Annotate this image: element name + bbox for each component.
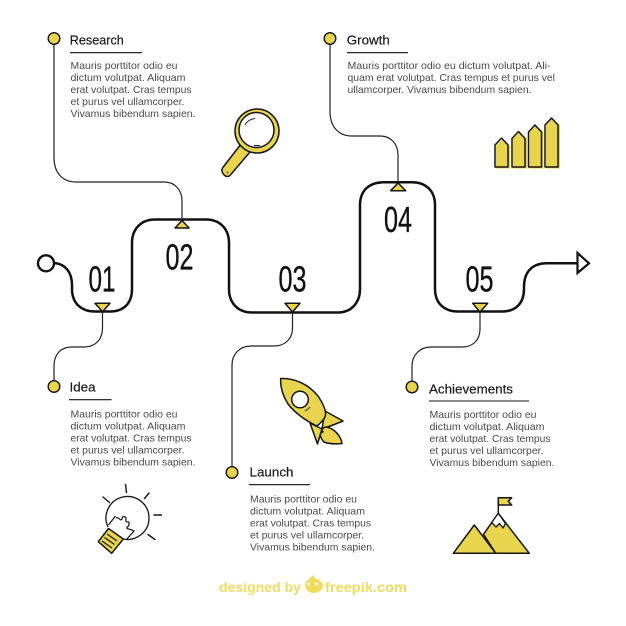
- step 02: Research: Mauris porttitor odio eu: [70, 61, 178, 72]
- step 04: Growth: Mauris porttitor odio eu dictum volutpat. Ali-: [348, 61, 550, 72]
- step 05: Achievements: 05: [466, 258, 494, 300]
- step 02: Research: 02: [166, 236, 194, 278]
- step 03: Launch: [226, 258, 375, 553]
- icon: mountains with flag: [453, 498, 529, 553]
- icon: magnifying glass: [222, 109, 279, 176]
- step 03: Launch: Launch: [250, 465, 294, 480]
- step 04: Growth: Growth: [347, 32, 390, 47]
- step 02: Research: dictum volutpat. Aliquam: [70, 73, 186, 84]
- footer: designed by freepik: freepik.com: [325, 579, 407, 595]
- step 01: Idea: erat volutpat. Cras tempus: [70, 433, 192, 444]
- step 01: Idea: Mauris porttitor odio eu: [70, 409, 178, 420]
- icon: rocket: [281, 378, 343, 444]
- step 04: Growth: [324, 32, 555, 240]
- step 01: Idea: dictum volutpat. Aliquam: [70, 421, 186, 432]
- step 02: Research: Research: [70, 32, 124, 47]
- step 03: Launch: dictum volutpat. Aliquam: [250, 506, 365, 517]
- step 03: Launch: Vivamus bibendum sapien.: [250, 542, 375, 553]
- step 03: Launch: 03: [278, 258, 306, 300]
- footer: designed by freepik: designed by: [219, 579, 301, 595]
- step 01: Idea: et purus vel ullamcorper.: [70, 445, 184, 456]
- step 05: Achievements: Mauris porttitor odio eu: [430, 410, 537, 421]
- step 02: Research: [48, 32, 196, 277]
- icon: freepik crown: [305, 575, 323, 593]
- step 02: Research: erat volutpat. Cras tempus: [70, 85, 192, 96]
- footer: designed by freepik: [219, 575, 407, 595]
- step 04: Growth: quam erat volutpat. Cras tempus et purus vel: [348, 73, 555, 84]
- timeline path: [38, 182, 589, 312]
- step 05: Achievements: [406, 258, 554, 469]
- step 03: Launch: Mauris porttitor odio eu: [250, 494, 357, 505]
- step 02: Research: Vivamus bibendum sapien.: [70, 109, 196, 120]
- step 05: Achievements: dictum volutpat. Aliquam: [430, 422, 544, 433]
- step 05: Achievements: Achievements: [429, 382, 514, 396]
- step 01: Idea: Idea: [70, 380, 96, 395]
- step 05: Achievements: erat volutpat. Cras tempus: [430, 434, 550, 445]
- icon: growth bars: [495, 118, 560, 168]
- icon: light bulb with puzzle filament: [98, 484, 162, 553]
- step 02: Research: et purus vel ullamcorper.: [70, 97, 184, 108]
- step 01: Idea: 01: [88, 258, 116, 300]
- step 01: Idea: [48, 258, 196, 468]
- step 05: Achievements: Vivamus bibendum sapien.: [430, 458, 554, 469]
- step 04: Growth: ullamcorper. Vivamus bibendum sapien.: [348, 85, 532, 96]
- step 03: Launch: et purus vel ullamcorper.: [250, 530, 364, 541]
- step 01: Idea: Vivamus bibendum sapien.: [70, 457, 196, 468]
- step 05: Achievements: et purus vel ullamcorper.: [430, 446, 544, 457]
- step 04: Growth: 04: [384, 199, 412, 240]
- step 03: Launch: erat volutpat. Cras tempus: [250, 518, 371, 529]
